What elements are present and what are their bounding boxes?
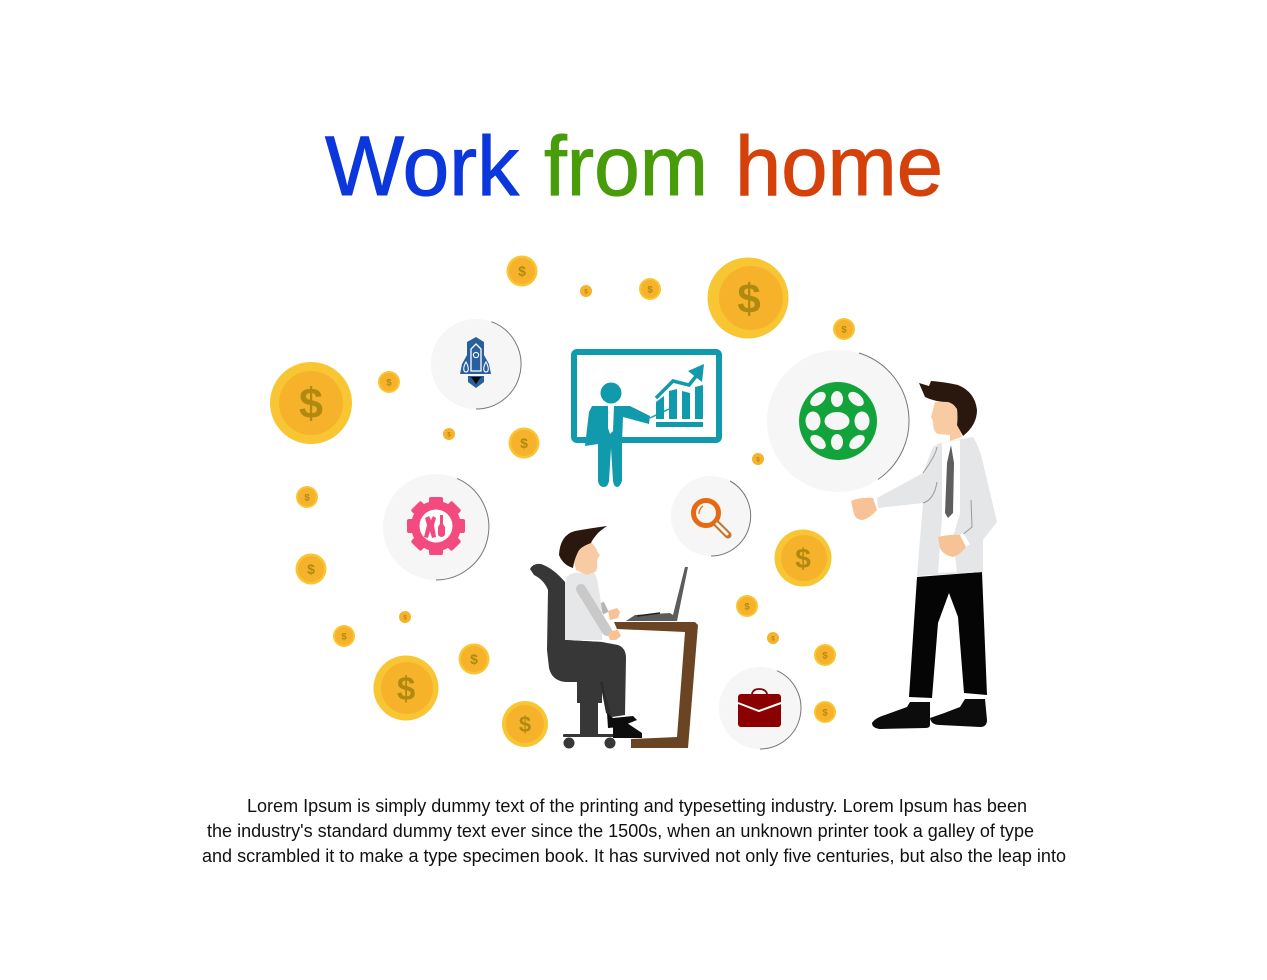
head [931, 402, 962, 441]
coin tiny set: $ [403, 616, 407, 622]
body text: and scrambled it to make a type specimen book. It has survived not only five centuries, but also the leap into [202, 846, 1066, 866]
jacket [877, 437, 997, 576]
coin large top: $ [737, 275, 761, 322]
laptop [626, 567, 688, 621]
coin large bottom left [374, 656, 438, 720]
body text: Lorem Ipsum is simply dummy text of the printing and typesetting industry. Lorem Ipsum has been [247, 796, 1027, 816]
coin right [774, 530, 832, 586]
head [574, 541, 600, 575]
coin small set: $ [304, 492, 310, 504]
back arm [601, 603, 606, 613]
rising bar chart [656, 364, 704, 427]
torso [565, 572, 602, 640]
presentation icon [574, 352, 719, 487]
coin medium set: $ [520, 435, 528, 451]
coin small set: $ [822, 650, 828, 662]
coin medium set: $ [470, 651, 478, 667]
trousers [909, 572, 987, 698]
coin small set: $ [744, 602, 750, 612]
coin large bottom left: $ [397, 670, 415, 707]
coin right: $ [795, 543, 811, 574]
title [325, 119, 943, 213]
coin large left: $ [299, 380, 323, 428]
body text: the industry's standard dummy text ever since the 1500s, when an unknown printer took a galley of type [207, 821, 1034, 841]
coin tiny set: $ [771, 636, 775, 642]
coin small set: $ [822, 708, 828, 718]
coin large top [708, 258, 788, 338]
coin small set: $ [841, 324, 847, 336]
coin medium set: $ [307, 561, 315, 577]
hands [851, 498, 877, 520]
near arm [581, 589, 607, 631]
desk [614, 622, 698, 748]
coin tiny set: $ [756, 458, 760, 464]
coin medium set [296, 256, 540, 674]
icon: rocket [431, 319, 521, 409]
coins [270, 256, 855, 747]
presenter figure [585, 382, 669, 487]
coin small set: $ [647, 284, 653, 296]
seated man at desk [530, 526, 698, 748]
shoes [930, 699, 987, 727]
coin tiny set: $ [584, 290, 588, 296]
icon: gear with tools [383, 474, 489, 580]
body text [202, 796, 1066, 866]
coin bottom: $ [519, 712, 531, 737]
far leg and shoes [600, 682, 612, 717]
near shoe [613, 723, 642, 738]
title: Work [325, 119, 520, 213]
coin tiny set [399, 285, 779, 644]
icon: green globe [767, 350, 909, 492]
standing man [851, 381, 997, 729]
icon: magnifier [671, 476, 751, 556]
trousers [565, 640, 626, 717]
coin small set: $ [386, 378, 392, 388]
office chair [530, 564, 616, 748]
title: home [735, 119, 943, 213]
coin small set: $ [341, 632, 347, 642]
title: from [544, 119, 708, 213]
coin bottom [502, 701, 548, 747]
icon: briefcase [719, 667, 801, 749]
tie [945, 445, 954, 518]
shirt front [938, 440, 960, 573]
coin large left [270, 362, 352, 444]
coin tiny set: $ [447, 432, 451, 438]
coin medium set: $ [518, 263, 526, 279]
coin small set [296, 278, 855, 723]
